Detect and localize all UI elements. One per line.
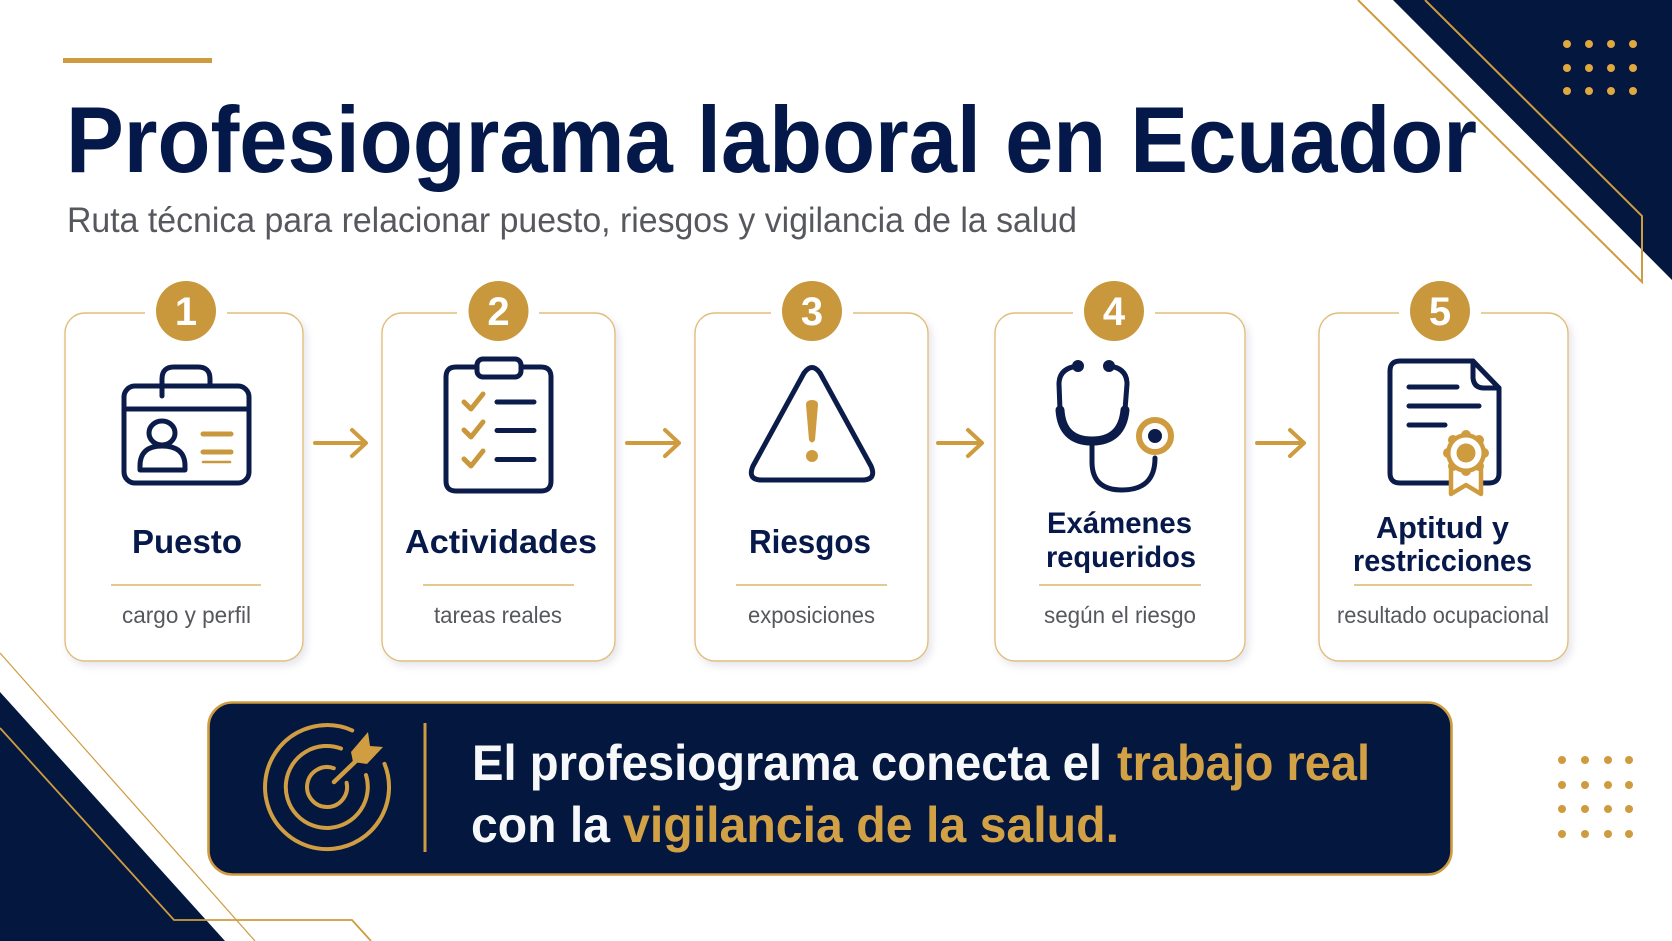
icon: target with arrow: [265, 725, 389, 849]
label: tareas reales: tareas reales: [434, 602, 562, 628]
number badge 2: [468, 281, 528, 341]
arrow 3: [938, 430, 982, 456]
heading: restricciones: restricciones: [1353, 544, 1532, 578]
icon: clipboard checklist: [446, 359, 551, 491]
callout banner: [208, 702, 1452, 874]
panel: step 5 Aptitud y restricciones: [1319, 281, 1568, 661]
number badge 1: 1: [175, 290, 197, 334]
heading: requeridos: requeridos: [1046, 541, 1196, 574]
number badge 3: [782, 281, 842, 341]
label: exposiciones: exposiciones: [748, 602, 875, 628]
icon: warning triangle: [751, 368, 873, 480]
heading: Puesto: Puesto: [132, 523, 242, 560]
number badge 4: 4: [1103, 290, 1126, 334]
number badge 1: [156, 281, 216, 341]
number badge 3: 3: [801, 290, 823, 334]
dot grid bottom right: [1558, 756, 1633, 838]
title: Profesiograma laboral en Ecuador: [66, 87, 1477, 192]
heading: Riesgos: Riesgos: [749, 523, 871, 560]
label: resultado ocupacional: resultado ocupacional: [1337, 602, 1549, 628]
accent bar: [63, 58, 212, 63]
message line 2: vigilancia de la salud.: [623, 797, 1119, 853]
message line 1: El profesiograma conecta el: [472, 735, 1102, 791]
panel: step 2 Actividades: [382, 281, 615, 661]
icon: id card briefcase: [124, 367, 249, 483]
arrow 1: [315, 430, 366, 456]
top right corner decoration: [1358, 0, 1672, 282]
arrow 2: [627, 430, 679, 456]
bottom left corner decoration: [0, 653, 371, 941]
message line 1: trabajo real: [1117, 735, 1370, 791]
icon: stethoscope: [1059, 360, 1171, 490]
subtitle: Ruta técnica para relacionar puesto, riesgos y vigilancia de la salud: [67, 201, 1077, 240]
number badge 2: 2: [487, 290, 510, 334]
panel: step 3 Riesgos: [695, 281, 928, 661]
number badge 4: [1084, 281, 1144, 341]
heading: Actividades: Actividades: [405, 523, 597, 560]
icon: certificate document: [1390, 361, 1499, 494]
panel: step 4 Exámenes requeridos: [995, 281, 1245, 661]
number badge 5: [1410, 281, 1470, 341]
label: según el riesgo: según el riesgo: [1044, 602, 1196, 628]
number badge 5: 5: [1429, 290, 1451, 334]
heading: Exámenes: Exámenes: [1047, 507, 1192, 540]
message line 2: con la: [471, 797, 611, 853]
panel: step 1 Puesto: [65, 281, 303, 661]
arrow 4: [1257, 430, 1304, 456]
heading: Aptitud y: Aptitud y: [1376, 511, 1509, 545]
label: cargo y perfil: cargo y perfil: [122, 602, 251, 628]
